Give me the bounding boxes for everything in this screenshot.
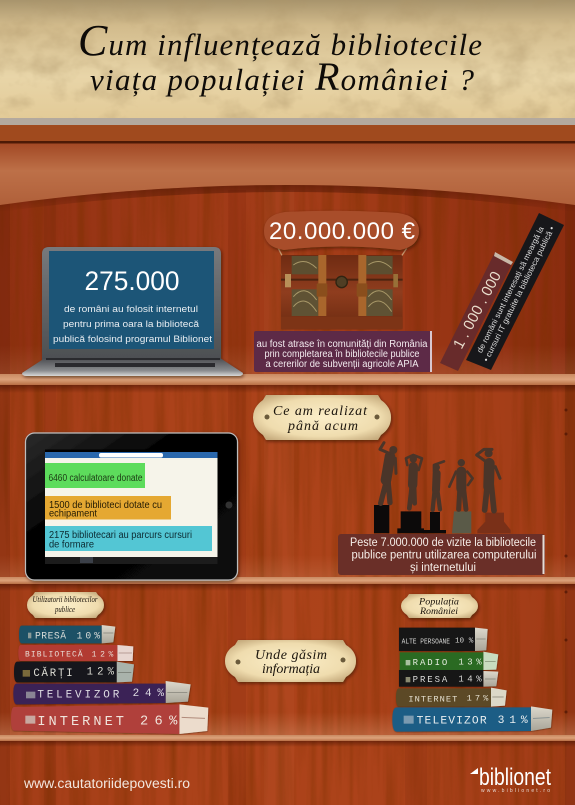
top moulding and arch	[0, 117, 575, 212]
panel: visits caption: publice pentru utilizarea computerului	[352, 550, 536, 562]
panel: APIA caption: a cererilor de subvenții agricole APIA	[266, 359, 419, 370]
parchment header	[0, 0, 575, 118]
label: 20.000.000 €: 20.000.000 €	[269, 218, 416, 245]
bar: trained librarians	[45, 526, 212, 551]
book: Bibliotecă 12%	[18, 645, 133, 661]
book: Presă 10%	[19, 625, 115, 643]
treasure chest	[278, 248, 407, 329]
book: Cărți 12%: 12%	[87, 666, 115, 678]
shelves	[0, 345, 575, 747]
panel: APIA caption: prin completarea în bibliotecile publice	[264, 349, 420, 360]
logo: biblionet: www.biblionet.ro	[481, 788, 550, 794]
logo: biblionet: biblionet	[479, 764, 551, 791]
bar: equipped libraries: echipament	[49, 508, 97, 520]
bar: trained librarians: de formare	[49, 540, 94, 550]
panel: APIA caption: au fost atrase în comunități din România	[256, 339, 428, 350]
panel: visits caption: și internetului	[410, 562, 476, 574]
plaque: Utilizatorii bibliotecilor publice	[27, 592, 104, 618]
plaque: Unde găsim informația: Unde găsim	[255, 648, 327, 663]
book: Televizor 24%: TELEVIZOR	[37, 689, 120, 701]
leaning book: courses	[466, 213, 564, 370]
bar: equipped libraries: 1500 de biblioteci dotate cu	[49, 500, 162, 511]
book: Cărți 12%: CĂRȚI	[33, 666, 73, 680]
book: Cărți 12%	[14, 662, 134, 682]
book: Radio 13%	[400, 652, 498, 670]
leaning book: courses: • cursuri IT gratuite la biblioteca publică •	[482, 225, 557, 363]
title	[78, 16, 482, 99]
plaque: Utilizatorii bibliotecilor publice: Utilizatorii bibliotecilor	[32, 595, 98, 604]
book: Alte persoane 10%	[399, 628, 488, 651]
panel: visits caption: Peste 7.000.000 de vizite la bibliotecile	[350, 537, 536, 549]
bar: trained librarians: 2175 bibliotecari au parcurs cursuri	[49, 530, 192, 541]
laptop headline number: 275.000	[84, 266, 180, 296]
bar: equipped libraries	[45, 496, 171, 520]
statuettes	[374, 443, 511, 533]
book: Presă 10%: PRESĂ	[35, 630, 66, 641]
bar: computers donated: 6460 calculatoare donate	[48, 473, 143, 484]
laptop: 275.000	[22, 247, 243, 376]
panel: APIA caption	[254, 331, 432, 372]
book: Televizor 31%	[392, 706, 552, 732]
book: Presa 14%: 14%	[458, 674, 482, 684]
label: 20.000.000 €	[264, 211, 419, 250]
leaning book: 1.000.000: 1 . 000 . 000	[450, 269, 505, 352]
book: Alte persoane 10%: 10 %	[455, 637, 474, 645]
book: Televizor 24%: 24%	[133, 688, 164, 700]
book: Radio 13%: 13%	[458, 657, 482, 667]
book: Presa 14%	[399, 670, 498, 687]
book: Televizor 31%: 31%	[498, 715, 528, 727]
plaque: Unde găsim informația	[225, 640, 356, 682]
book: Internet 26%: INTERNET	[37, 715, 124, 730]
plaque: Ce am realizat până acum: până acum	[287, 419, 358, 434]
book: Alte persoane 10%: ALTE PERSOANE	[402, 639, 450, 647]
plaque: Ce am realizat până acum: Ce am realizat	[273, 404, 368, 419]
laptop caption: de români au folosit internetul	[64, 304, 198, 315]
plaque: Populația României: României	[419, 607, 458, 617]
bar: computers donated	[45, 463, 145, 488]
book: Internet 26%	[11, 704, 208, 734]
book: Televizor 31%: TELEVIZOR	[417, 716, 487, 728]
book: Bibliotecă 12%: BIBLIOTECĂ	[25, 650, 83, 659]
book: Internet 17%: 17%	[467, 694, 489, 704]
plaque: Utilizatorii bibliotecilor publice: publice	[54, 605, 75, 614]
book stack: library users	[11, 625, 208, 734]
laptop caption	[53, 304, 212, 345]
book: Bibliotecă 12%: 12%	[92, 650, 114, 659]
leaning book: 1.000.000	[440, 252, 513, 371]
book: Televizor 24%	[13, 681, 191, 704]
logo: biblionet	[470, 764, 551, 794]
book: Presă 10%: 10%	[77, 630, 100, 641]
book: Internet 26%: 26%	[140, 714, 178, 729]
book: Internet 17%: INTERNET	[408, 695, 457, 705]
leaning book: courses: de români sunt interesați să meargă la	[475, 225, 546, 354]
panel: visits caption	[338, 534, 545, 575]
tablet	[26, 433, 238, 580]
laptop caption: publică folosind programul Biblionet	[53, 334, 212, 345]
book stack: Romanian population	[392, 628, 552, 732]
plaque: Populația României	[401, 594, 478, 618]
plaque: Ce am realizat până acum	[253, 395, 391, 440]
title: Cum influențează bibliotecile	[78, 16, 482, 65]
website url: www.cautatoriidepovesti.ro	[23, 776, 190, 791]
plaque: Populația României: Populația	[418, 598, 459, 608]
book: Internet 17%	[396, 688, 507, 707]
title: viața populației României ?	[90, 54, 474, 99]
book: Presa 14%: PRESA	[413, 675, 448, 685]
book: Radio 13%: RADIO	[413, 658, 447, 668]
laptop caption: pentru prima oara la bibliotecă	[63, 319, 200, 330]
plaque: Unde găsim informația: informația	[262, 662, 320, 677]
